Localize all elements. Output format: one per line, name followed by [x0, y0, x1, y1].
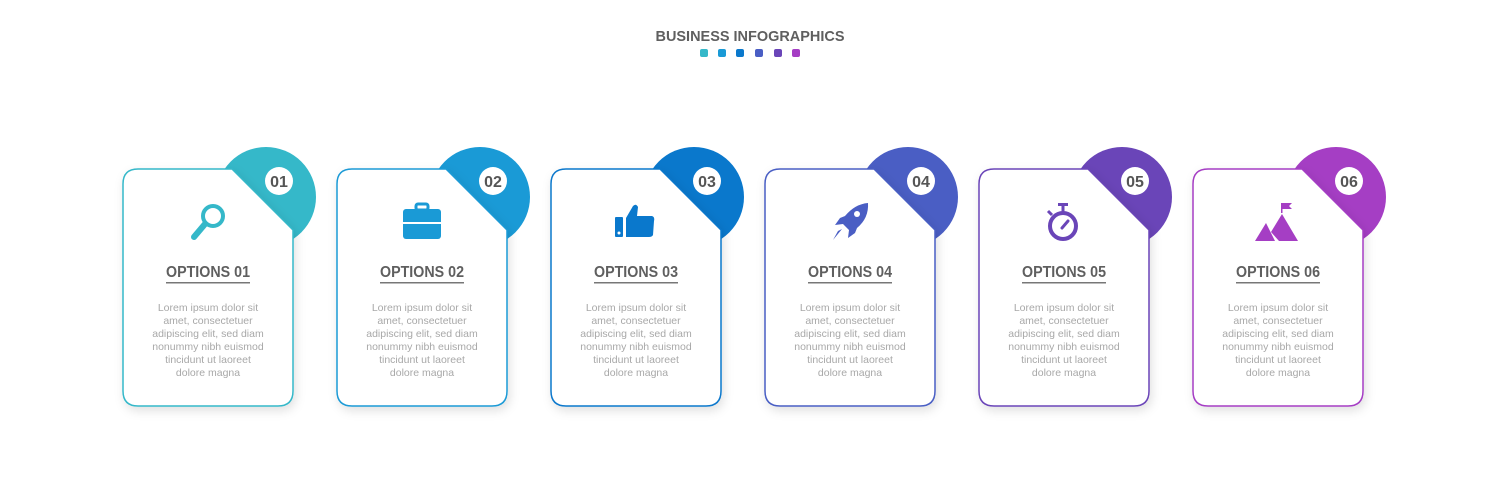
panel: option 03: adipiscing elit, sed diam	[580, 328, 692, 340]
panel: option 01: OPTIONS 01	[166, 264, 250, 281]
title	[656, 28, 844, 57]
panel: option 04: amet, consectetuer	[805, 315, 895, 327]
panel: option 02: Lorem ipsum dolor sit	[372, 302, 472, 314]
panel: option 05	[979, 147, 1172, 406]
panel: option 01: amet, consectetuer	[163, 315, 253, 327]
panel: option 06: OPTIONS 06	[1236, 264, 1320, 281]
panel: option 06: dolore magna	[1246, 367, 1310, 379]
panel: option 03: nonummy nibh euismod	[580, 341, 692, 353]
icon: stopwatch	[1048, 203, 1076, 239]
panel: option 06: amet, consectetuer	[1233, 315, 1323, 327]
panel: option 02: nonummy nibh euismod	[366, 341, 478, 353]
panel: option 04: adipiscing elit, sed diam	[794, 328, 906, 340]
panel: option 06	[1193, 147, 1386, 406]
panel: option 01: tincidunt ut laoreet	[165, 354, 251, 366]
panel: option 04: Lorem ipsum dolor sit	[800, 302, 900, 314]
icon: magnifier	[194, 206, 223, 237]
title: BUSINESS INFOGRAPHICS	[656, 28, 844, 45]
panel: option 06: adipiscing elit, sed diam	[1222, 328, 1334, 340]
panel: option 02: 02	[484, 174, 502, 191]
panel: option 04: tincidunt ut laoreet	[807, 354, 893, 366]
panel: option 04	[765, 147, 958, 406]
panel: option 04: nonummy nibh euismod	[794, 341, 906, 353]
panel: option 05: dolore magna	[1032, 367, 1096, 379]
panel: option 05: tincidunt ut laoreet	[1021, 354, 1107, 366]
panel: option 03: dolore magna	[604, 367, 668, 379]
icon: rocket	[833, 203, 868, 240]
panel: option 04: dolore magna	[818, 367, 882, 379]
panel: option 01: Lorem ipsum dolor sit	[158, 302, 258, 314]
panel: option 04: OPTIONS 04	[808, 264, 892, 281]
panel: option 05: Lorem ipsum dolor sit	[1014, 302, 1114, 314]
panel: option 05: adipiscing elit, sed diam	[1008, 328, 1120, 340]
panel: option 01: dolore magna	[176, 367, 240, 379]
panel: option 02: tincidunt ut laoreet	[379, 354, 465, 366]
panel: option 06: tincidunt ut laoreet	[1235, 354, 1321, 366]
panel: option 01: nonummy nibh euismod	[152, 341, 264, 353]
panel: option 03: 03	[698, 174, 716, 191]
icon: thumbs up	[615, 205, 654, 237]
panel: option 03	[551, 147, 744, 406]
icon: briefcase	[403, 204, 441, 239]
panel: option 05: 05	[1126, 174, 1144, 191]
panel: option 06: 06	[1340, 174, 1358, 191]
panel: option 03: tincidunt ut laoreet	[593, 354, 679, 366]
panel: option 02: dolore magna	[390, 367, 454, 379]
panel: option 02: amet, consectetuer	[377, 315, 467, 327]
panel: option 05: nonummy nibh euismod	[1008, 341, 1120, 353]
panel: option 05: OPTIONS 05	[1022, 264, 1106, 281]
panel: option 03: amet, consectetuer	[591, 315, 681, 327]
icon: mountain flag	[1255, 203, 1298, 241]
panel: option 03: OPTIONS 03	[594, 264, 678, 281]
panel: option 03: Lorem ipsum dolor sit	[586, 302, 686, 314]
panel: option 05: amet, consectetuer	[1019, 315, 1109, 327]
panel: option 02: adipiscing elit, sed diam	[366, 328, 478, 340]
panel: option 06: Lorem ipsum dolor sit	[1228, 302, 1328, 314]
panel: option 02	[337, 147, 530, 406]
panel: option 04: 04	[912, 174, 930, 191]
panel: option 01: adipiscing elit, sed diam	[152, 328, 264, 340]
panel: option 01	[123, 147, 316, 406]
panel: option 02: OPTIONS 02	[380, 264, 464, 281]
panel: option 06: nonummy nibh euismod	[1222, 341, 1334, 353]
panel: option 01: 01	[270, 174, 288, 191]
